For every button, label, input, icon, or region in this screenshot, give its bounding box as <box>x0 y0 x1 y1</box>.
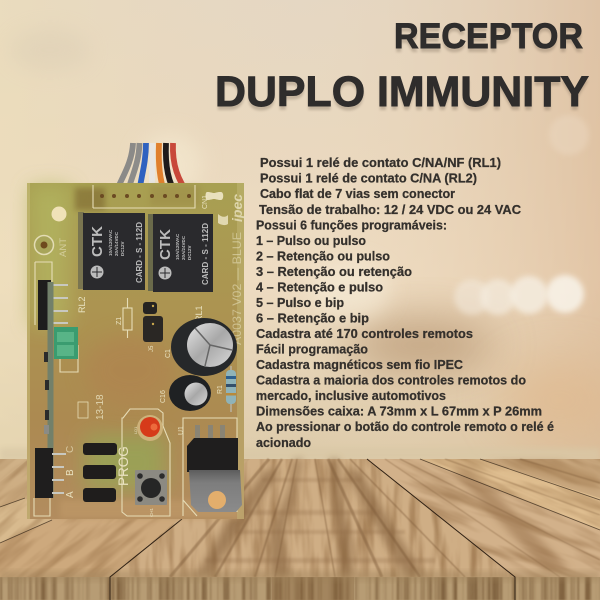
product specifications text block: Cadastra magnéticos sem fio IPEC <box>256 358 463 372</box>
background: blurred beige wall <box>0 0 600 462</box>
silkscreen labels: C16 <box>160 390 167 403</box>
silkscreen outlines <box>34 185 237 516</box>
upper-left black pin header <box>38 280 68 330</box>
silkscreen labels: A <box>65 491 76 498</box>
plank front edge <box>0 571 600 600</box>
silkscreen labels: Z1 <box>116 317 123 325</box>
silkscreen labels: RL1 <box>194 305 204 322</box>
product specifications text block: Possui 1 relé de contato C/NA (RL2) <box>260 172 477 186</box>
silkscreen labels: ANT <box>58 238 69 257</box>
product specifications text block: Possui 6 funções programáveis: <box>256 218 447 232</box>
product specifications text block: 4 – Retenção e pulso <box>256 280 383 294</box>
relay RL1: CARD - S - 112D <box>201 223 210 285</box>
relay RL2: CARD - S - 112D <box>135 222 144 283</box>
flat cable wires <box>115 143 189 195</box>
silkscreen labels: ipec <box>229 194 245 222</box>
perspective wood grain lines <box>170 459 600 577</box>
jumpers <box>83 443 117 502</box>
title: DUPLO IMMUNITY <box>215 72 589 120</box>
silkscreen labels: LD1 <box>133 426 138 434</box>
silkscreen labels: C1 <box>165 349 172 358</box>
lower-left black pin header <box>35 448 66 498</box>
product specifications text block: 6 – Retenção e bip <box>256 312 369 326</box>
silkscreen labels: CH1 <box>149 508 154 517</box>
jumper J5 <box>143 302 163 342</box>
relay RL2 <box>78 212 145 290</box>
silkscreen labels: U1 <box>178 426 185 435</box>
mounting hole <box>52 206 66 222</box>
product specifications text block: Tensão de trabalho: 12 / 24 VDC ou 24 VAC <box>259 203 521 217</box>
product specifications text block: Fácil programação <box>256 342 368 356</box>
relay RL2: CTK <box>89 226 106 257</box>
product specifications text block: Dimensões caixa: A 73mm x L 67mm x P 26mm <box>256 404 542 418</box>
relay RL2: 20A/14VDC <box>114 231 119 256</box>
white silkscreen marks <box>206 192 228 225</box>
title <box>215 17 589 120</box>
relay RL1: 20A/24VDC <box>181 235 186 260</box>
product specifications text block: Ao pressionar o botão do controle remoto o relé é <box>256 420 554 434</box>
title: RECEPTOR <box>394 21 583 60</box>
silkscreen labels: R1 <box>217 385 224 394</box>
product specifications text block: Cadastra até 170 controles remotos <box>256 327 473 341</box>
LED <box>137 415 163 441</box>
resistor R1 <box>226 366 236 412</box>
capacitor C1 <box>171 318 237 376</box>
product specifications text block: 5 – Pulso e bip <box>256 296 344 310</box>
board substrate <box>27 183 244 519</box>
product specifications text block: acionado <box>256 436 311 450</box>
product specifications text block: mercado, inclusive automotivos <box>256 389 446 403</box>
relay RL2: 10A/120VAC <box>108 229 113 256</box>
receiver circuit board <box>27 143 245 519</box>
relay RL2: DC12V <box>120 241 125 256</box>
silkscreen labels: 13-18 <box>95 394 106 420</box>
silkscreen labels: J5 <box>149 345 155 352</box>
relay RL1 <box>148 214 213 292</box>
relay RL1: DC12V <box>187 245 192 260</box>
silkscreen labels: C <box>65 446 76 453</box>
relay RL1: CTK <box>157 229 174 260</box>
silkscreen labels: B <box>65 469 76 476</box>
push button <box>135 470 167 505</box>
voltage regulator U1 <box>187 425 242 512</box>
cross-grain rings on center plank <box>205 478 435 563</box>
silkscreen labels: PROG <box>116 446 131 486</box>
product specifications text block: 3 – Retenção ou retenção <box>256 265 412 279</box>
wooden table floor <box>0 459 600 600</box>
silkscreen labels: A0037 V02 — BLUE <box>230 232 244 345</box>
green terminal connector <box>54 327 78 359</box>
capacitor C16 <box>169 375 211 411</box>
vertical RF module strip <box>44 282 54 498</box>
center plank dark grain bands <box>195 459 600 577</box>
product specifications text block: Cabo flat de 7 vias sem conector <box>260 187 455 201</box>
silkscreen labels: CN1 <box>202 195 209 209</box>
silkscreen labels <box>58 194 245 517</box>
product specifications text block: 1 – Pulso ou pulso <box>256 234 366 248</box>
title: DUPLO IMMUNITY <box>215 68 589 116</box>
product specifications text block <box>256 156 554 450</box>
title: RECEPTOR <box>394 17 583 56</box>
diode Z1 <box>123 298 132 338</box>
product specifications text block: Cadastra a maioria dos controles remotos do <box>256 374 526 388</box>
connector CN1 solder pads <box>100 194 191 198</box>
antenna pad <box>34 236 54 254</box>
silkscreen labels: RL2 <box>77 296 87 313</box>
product specifications text block: Possui 1 relé de contato C/NA/NF (RL1) <box>260 156 501 170</box>
product specifications text block: 2 – Retenção ou pulso <box>256 250 390 264</box>
relay RL1: 10A/120VAC <box>175 233 180 260</box>
